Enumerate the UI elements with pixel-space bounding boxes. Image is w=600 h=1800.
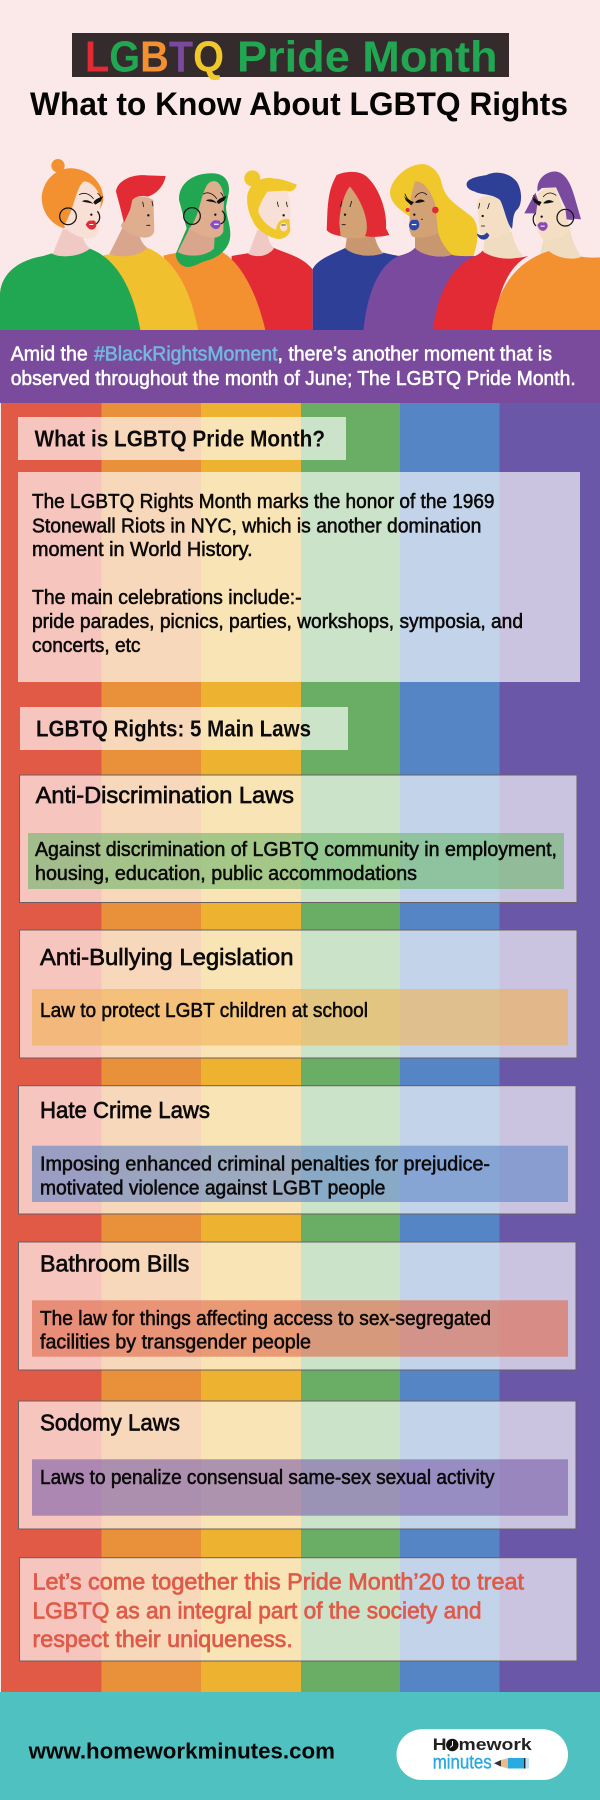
panel: anti-bullying legislation — [20, 930, 577, 1058]
heading: 5 main laws — [20, 707, 348, 750]
callout: closing message: LGBTQ as an integral part of the society and — [32, 1597, 482, 1623]
panel: anti-bullying legislation: Anti-Bullying Legislation — [40, 944, 294, 970]
logo: homework minutes: minutes — [433, 1752, 492, 1773]
callout: closing message — [20, 1558, 577, 1661]
panel: anti-bullying legislation: Law to protect LGBT children at school — [40, 1000, 368, 1022]
panel: what is pride month: The LGBTQ Rights Month marks the honor of the 1969 — [32, 491, 494, 513]
panel: anti-discrimination laws — [20, 775, 577, 902]
panel: bathroom bills: The law for things affecting access to sex-segregated — [40, 1308, 491, 1330]
banner: intro text: observed throughout the month of June; The LGBTQ Pride Month. — [11, 368, 576, 390]
website url: www.homeworkminutes.com — [28, 1738, 335, 1763]
illustration: group of people, right half — [313, 164, 600, 332]
heading: 5 main laws: LGBTQ Rights: 5 Main Laws — [36, 716, 311, 742]
title: LGBTQ Pride Month: Pride Month — [237, 32, 498, 82]
panel: sodomy laws — [18, 1401, 576, 1529]
title: LGBTQ Pride Month: LGBTQ — [85, 32, 224, 82]
panel: what is pride month: concerts, etc — [32, 635, 140, 657]
banner: intro text — [0, 330, 600, 403]
panel: what is pride month: moment in World History. — [32, 539, 253, 561]
illustration: group of people, left half — [0, 159, 313, 332]
banner: intro text: #BlackRightsMoment — [94, 344, 278, 366]
logo: homework minutes — [396, 1729, 568, 1780]
title: LGBTQ Pride Month — [72, 32, 509, 82]
heading: What is LGBTQ Pride Month — [18, 417, 346, 460]
logo: homework minutes: Homework — [433, 1735, 532, 1754]
panel: what is pride month — [18, 472, 580, 682]
panel: hate crime laws — [18, 1086, 576, 1214]
heading: What is LGBTQ Pride Month: What is LGBTQ Pride Month? — [34, 426, 325, 452]
panel: what is pride month: pride parades, picnics, parties, workshops, symposia, and — [32, 611, 523, 633]
background: rainbow stripes — [1, 403, 600, 1692]
panel: hate crime laws: motivated violence against LGBT people — [40, 1178, 385, 1200]
panel: what is pride month: The main celebrations include:- — [32, 587, 302, 609]
panel: hate crime laws: Hate Crime Laws — [40, 1097, 210, 1123]
panel: sodomy laws: Laws to penalize consensual same-sex sexual activity — [40, 1467, 494, 1489]
panel: bathroom bills: Bathroom Bills — [40, 1251, 189, 1277]
panel: anti-discrimination laws: Against discrimination of LGBTQ community in employment, — [35, 839, 557, 861]
panel: what is pride month: Stonewall Riots in NYC, which is another domination — [32, 515, 481, 537]
callout: closing message: Let’s come together this Pride Month’20 to treat — [32, 1568, 525, 1594]
panel: bathroom bills: facilities by transgender people — [40, 1332, 311, 1354]
panel: sodomy laws: Sodomy Laws — [40, 1410, 180, 1436]
banner: intro text: Amid the — [11, 344, 88, 366]
panel: hate crime laws: Imposing enhanced criminal penalties for prejudice- — [40, 1154, 490, 1176]
subtitle: What to Know About LGBTQ Rights — [30, 86, 568, 122]
panel: anti-discrimination laws: housing, education, public accommodations — [35, 863, 417, 885]
panel: anti-discrimination laws: Anti-Discrimination Laws — [36, 782, 294, 808]
banner: intro text: , there’s another moment that is — [278, 344, 552, 366]
footer — [0, 1692, 600, 1800]
panel: bathroom bills — [18, 1242, 576, 1370]
callout: closing message: respect their uniqueness. — [32, 1626, 293, 1652]
